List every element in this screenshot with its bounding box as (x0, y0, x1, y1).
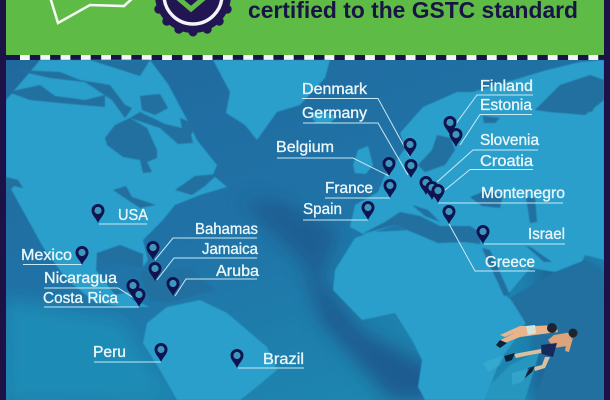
pin: Greece (442, 205, 456, 224)
label: Denmark: Denmark (302, 81, 368, 98)
label: Croatia (445, 153, 533, 190)
label: Bahamas: Bahamas (195, 221, 258, 238)
Gulf of St Lawrence (175, 174, 218, 195)
Eurasia (350, 60, 604, 298)
Baltic Sea (418, 135, 455, 172)
label: Bahamas (155, 221, 258, 260)
Arctic channels (8, 85, 105, 107)
pin: Croatia (426, 181, 438, 200)
label: Germany: Germany (302, 105, 367, 122)
pin: Belgium (382, 157, 396, 176)
icon: speech bubble outline (50, 0, 134, 23)
pin: Germany (404, 159, 418, 178)
label: Costa Rica: Costa Rica (43, 290, 118, 307)
label: Jamaica (157, 241, 258, 280)
label: Germany (302, 105, 408, 175)
Indian Ocean (510, 260, 604, 400)
label: Belgium: Belgium (276, 139, 334, 156)
pin: Nicaragua (126, 279, 140, 298)
map: Madagascar and lower east coast (485, 350, 540, 400)
pin: Finland (444, 116, 456, 135)
illustration: snorkelers (483, 323, 578, 385)
label: Estonia: Estonia (480, 97, 532, 114)
pin: Mexico (76, 246, 88, 265)
Gulf of Mexico (97, 245, 143, 268)
pin: Aruba (166, 277, 180, 296)
pin: Jamaica (148, 262, 162, 281)
Hudson Bay (105, 118, 157, 173)
Gulf of Finland and White Sea (483, 116, 500, 123)
icon: certification badge (152, 0, 234, 36)
label: Greece: Greece (485, 254, 535, 271)
pin: France (384, 179, 396, 198)
label: Israel (484, 226, 565, 244)
label: Nicaragua (44, 270, 134, 298)
pin: Israel (476, 225, 490, 244)
Black Sea (470, 191, 503, 208)
label: Estonia (460, 97, 532, 145)
label: Finland: Finland (480, 78, 533, 95)
label: Peru: Peru (93, 344, 126, 361)
label: USA: USA (118, 207, 148, 224)
snorkeler one (496, 323, 558, 348)
Africa (333, 230, 532, 400)
pin: Slovenia (420, 176, 432, 195)
label: Israel: Israel (528, 226, 565, 243)
label: Peru (93, 344, 161, 362)
pin: Costa Rica (132, 288, 146, 307)
pin: USA (92, 204, 104, 223)
Great Lakes (113, 186, 156, 208)
Gulf of California (6, 177, 23, 195)
label: USA (99, 207, 148, 224)
Iceland (310, 111, 338, 123)
pin: Bahamas (146, 241, 160, 260)
pin: Estonia (450, 128, 462, 147)
label: Brazil: Brazil (263, 351, 304, 368)
Greenland (213, 60, 330, 140)
dashed divider strip (0, 55, 610, 60)
label: Denmark (302, 81, 410, 157)
label: Croatia: Croatia (480, 153, 533, 170)
label: Nicaragua: Nicaragua (44, 270, 117, 287)
pin: Denmark (404, 138, 416, 157)
pin: Spain (362, 201, 374, 220)
snorkeler two (483, 328, 578, 385)
label: France: France (325, 180, 373, 197)
Persian Gulf (525, 245, 552, 262)
label: Slovenia: Slovenia (480, 132, 539, 149)
label: Slovenia (437, 132, 539, 182)
label: Brazil (238, 351, 304, 368)
label: Greece (449, 224, 535, 271)
panel: green header (0, 0, 610, 56)
label: Mexico: Mexico (21, 247, 72, 264)
South America (143, 300, 277, 400)
pin: Montenegro (432, 184, 444, 203)
label: Montenegro: Montenegro (481, 185, 565, 202)
North and Central America (6, 60, 227, 307)
Red Sea (482, 248, 510, 296)
label: Finland (455, 78, 533, 125)
label: Montenegro (438, 185, 565, 203)
Caribbean (140, 268, 215, 302)
Mediterranean (362, 212, 482, 244)
label: Spain: Spain (303, 201, 342, 218)
label: Aruba: Aruba (216, 263, 259, 280)
label: Aruba (175, 263, 259, 296)
pin: Brazil (230, 349, 244, 368)
Great Britain and Ireland (353, 146, 373, 174)
pin: Peru (154, 343, 168, 362)
label: Belgium (276, 139, 389, 176)
label: Spain (303, 201, 368, 220)
label: Jamaica: Jamaica (202, 241, 258, 258)
Caspian Sea (526, 197, 537, 223)
